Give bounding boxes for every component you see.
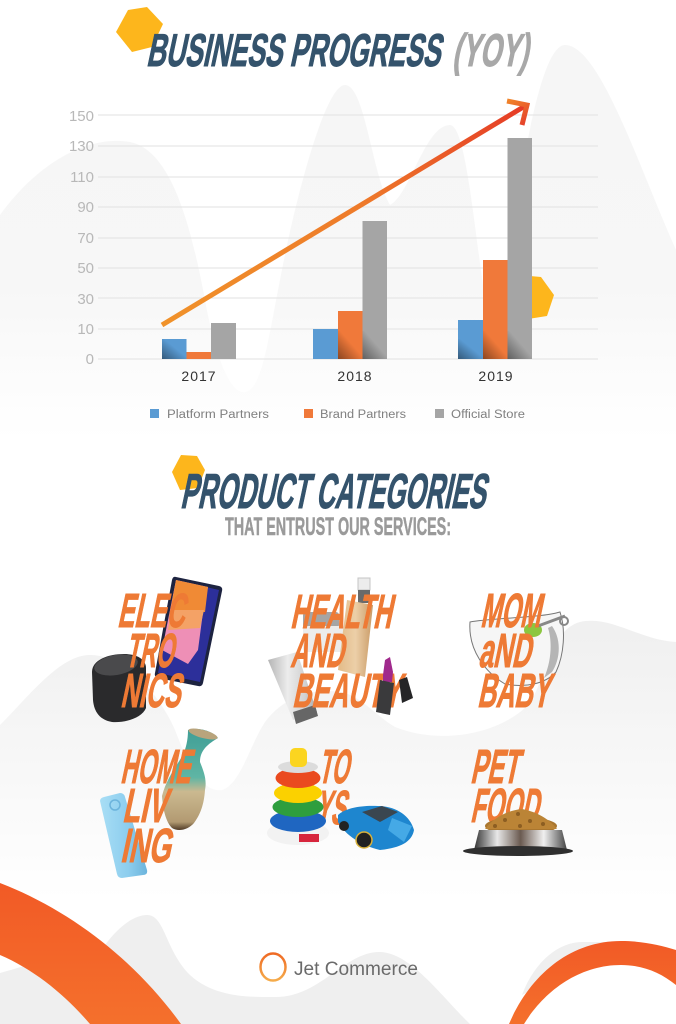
logo: jet commerce xyxy=(260,954,418,980)
chart grid lines and y axis xyxy=(69,108,598,368)
x axis years xyxy=(181,368,514,384)
bar chart: business progress xyxy=(69,101,598,421)
decorative hexagon: chart xyxy=(528,276,554,319)
title: BUSINESS PROGRESS xyxy=(144,24,449,76)
icon: toy car xyxy=(338,806,414,850)
label: pet food: PET xyxy=(468,740,527,794)
decorative arc: bottom left xyxy=(0,883,181,1024)
label: electronics xyxy=(115,584,193,718)
title: (YOY) xyxy=(450,24,537,76)
legend xyxy=(150,409,525,421)
logo wordmark: Jet Commerce xyxy=(294,958,418,980)
bars 2018 xyxy=(313,221,387,359)
background mountain: behind right arc xyxy=(522,942,612,995)
decorative hexagon: title xyxy=(116,7,163,52)
background mountains: top xyxy=(0,45,676,440)
x axis years: 2018 xyxy=(337,368,373,384)
icon: foundation bottle xyxy=(338,578,373,677)
chart grid lines and y axis: 30 xyxy=(77,291,94,308)
legend: Official Store xyxy=(451,409,525,421)
label: mom and baby: MOM xyxy=(478,584,549,638)
chart grid lines and y axis: 10 xyxy=(77,321,94,338)
legend: Platform Partners xyxy=(167,409,269,421)
label: pet food xyxy=(468,740,547,833)
x axis years: 2017 xyxy=(181,368,217,384)
icon: diaper xyxy=(470,612,568,686)
label: electronics: ELEC xyxy=(115,584,193,638)
decorative hexagon: product heading xyxy=(172,455,205,490)
icon: jar xyxy=(303,612,345,652)
icon: blue flask xyxy=(100,793,147,878)
category: mom and baby xyxy=(470,584,568,718)
label: electronics: TRO xyxy=(123,624,182,678)
icon: logo ring xyxy=(260,954,286,980)
label: toys xyxy=(313,740,357,835)
icon: speaker xyxy=(92,651,146,722)
label: home living: LIV xyxy=(120,779,175,833)
chart grid lines and y axis: 90 xyxy=(77,199,94,216)
label: mom and baby: aND xyxy=(476,624,539,678)
legend: Brand Partners xyxy=(320,409,406,421)
category: pet food xyxy=(463,740,573,856)
icon: smartphone xyxy=(155,577,222,686)
background mountains: bottom xyxy=(0,915,470,1024)
chart grid lines and y axis: 130 xyxy=(69,138,94,155)
label: health and beauty: AND xyxy=(288,624,352,678)
chart grid lines and y axis: 70 xyxy=(77,230,94,247)
label: electronics: NICS xyxy=(118,664,189,718)
chart grid lines and y axis: 50 xyxy=(77,260,94,277)
label: toys: YS xyxy=(313,781,354,835)
label: health and beauty: BEAUTY xyxy=(290,664,409,718)
bars 2017 xyxy=(162,323,236,359)
label: mom and baby xyxy=(475,584,558,718)
label: mom and baby: BABY xyxy=(475,664,558,718)
label: home living: ING xyxy=(118,819,179,873)
background mountains: middle xyxy=(0,621,676,910)
label: home living xyxy=(118,740,199,873)
icon: lipstick xyxy=(376,657,413,715)
chart grid lines and y axis: 110 xyxy=(70,169,94,186)
icon: pet bowl xyxy=(463,809,573,856)
label: home living: HOME xyxy=(118,740,199,794)
label: pet food: FOOD xyxy=(468,779,547,833)
label: health and beauty: HEALTH xyxy=(288,585,400,639)
chart grid lines and y axis: 150 xyxy=(69,108,94,125)
label: health and beauty xyxy=(288,585,409,718)
chart grid lines and y axis: 0 xyxy=(86,351,94,368)
category: electronics xyxy=(92,577,222,722)
decorative arc: bottom right xyxy=(509,941,676,1024)
label: toys: TO xyxy=(316,740,357,794)
category: home living xyxy=(100,726,219,878)
icon: stacking rings xyxy=(267,748,329,845)
category: toys xyxy=(267,740,414,850)
category: health and beauty xyxy=(268,578,413,724)
icon: glass vase xyxy=(162,726,219,830)
subheading: THAT ENTRUST OUR SERVICES: xyxy=(225,513,451,541)
x axis years: 2019 xyxy=(478,368,514,384)
growth arrow xyxy=(162,101,527,325)
bars 2019 xyxy=(458,138,532,359)
icon: tube xyxy=(268,652,318,724)
